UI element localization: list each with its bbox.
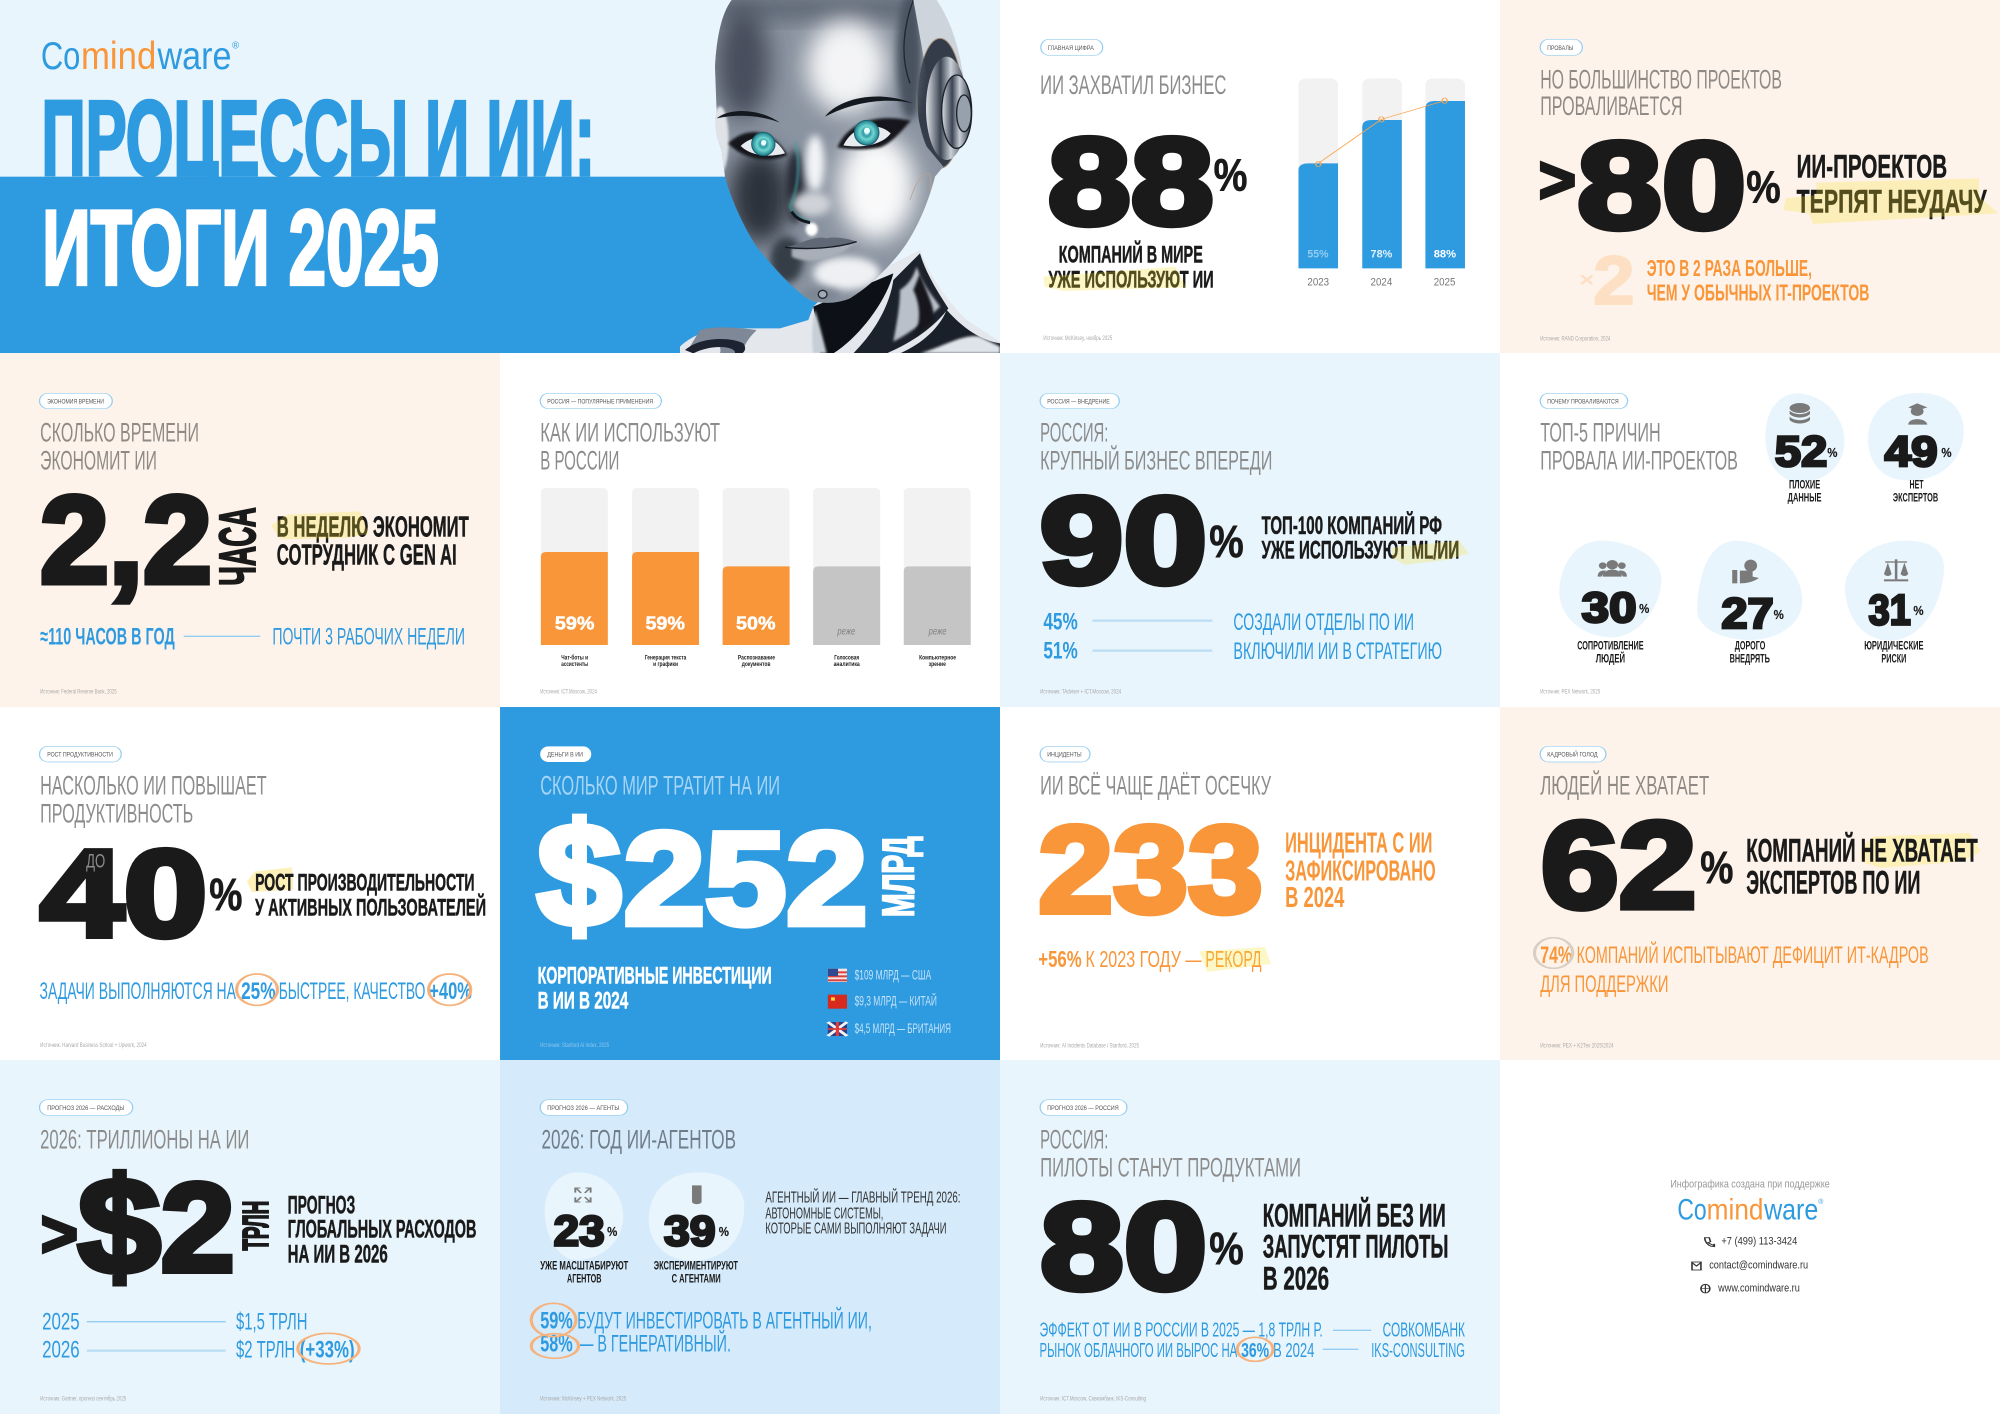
bar chart: 2023 [1307,275,1329,288]
deficit note: ДЛЯ ПОДДЕРЖКИ [1540,970,1668,997]
panel: $252B investment: $109 МЛРД — США [855,967,931,983]
stat: no experts [1868,393,1964,504]
stat: expensive [1697,541,1802,665]
text: ИНЦИДЕНТА С ИИ [1285,827,1432,859]
big number: $ [78,1150,161,1303]
big number [40,471,266,609]
effect and market lines [1040,1318,1465,1362]
tag [40,746,121,762]
tag: ИНЦИДЕНТЫ [1047,751,1082,759]
big number [1539,117,1781,254]
caption [1285,827,1436,914]
bar chart: 78% [1371,247,1392,260]
annual saving: ≈110 ЧАСОВ В ГОД [40,623,175,650]
stat: scaling [540,1172,628,1285]
panel: Russia pilots 80%: Источник: ICT.Moscow, Совкомбанк, IKS-Consulting [1040,1395,1146,1402]
big number: $ [537,794,621,957]
panel: contacts: ware [1764,1193,1818,1226]
tag [1540,746,1606,762]
text: СОЗДАЛИ ОТДЕЛЫ ПО ИИ [1233,608,1414,635]
stat: experimenting [649,1172,744,1285]
bar chart: 2024 [1371,275,1392,288]
caption: НА ИИ В 2026 [288,1240,388,1268]
panel: productivity 40% [0,707,500,1060]
text: В НЕДЕЛЮ ЭКОНОМИТ [277,511,469,543]
stat rows: 45% [1043,608,1078,635]
text: ЭФФЕКТ ОТ ИИ В РОССИИ В 2025 — 1,8 ТРЛН Р. [1040,1318,1323,1341]
yearly comparison: $1,5 ТРЛН [236,1308,307,1335]
heading: РОССИЯ: [1040,417,1108,448]
panel: contacts: contact@comindware.ru [1709,1259,1808,1271]
logo: Comindware: mind [81,34,156,78]
panel: productivity 40%: РОСТ ПРОДУКТИВНОСТИ [47,751,113,759]
speed and quality line: ЗАДАЧИ ВЫПОЛНЯЮТСЯ НА [40,977,236,1004]
breakdown by country [828,967,951,1036]
stat: legal risks: 31 [1869,586,1911,634]
bar chart: документов [742,661,770,668]
panel: hero title: ИТОГИ 2025 [42,189,439,307]
robot: brows [717,97,913,123]
big number: ДО [86,850,105,872]
title [41,79,595,307]
multiplier [1579,243,1635,319]
deficit note: 74% [1540,941,1572,968]
text: КОМПАНИЙ БЕЗ ИИ [1263,1197,1446,1234]
effect and market lines: 36% [1241,1338,1269,1362]
speed and quality line: 25% [241,977,276,1004]
panel: top-5 failure reasons: СОПРОТИВЛЕНИЕ [1577,639,1644,652]
big number: 2 [161,1157,235,1298]
panel: Russia pilots 80% [1000,1060,1500,1414]
bar chart: 50% [736,613,776,634]
logo: Comindware: Co [1677,1193,1707,1226]
heading [1040,1124,1301,1183]
caption [271,511,469,571]
panel: talent shortage 62%: Источник: PEX + K2Тех 2025/2024 [1540,1042,1614,1049]
bar chart: Генерация текста [645,654,686,662]
stat: no experts: % [1941,447,1952,460]
bar chart: 55% [1307,247,1328,260]
panel: year of AI agents: С АГЕНТАМИ [672,1271,721,1285]
heading: ТОП-5 ПРИЧИН [1540,417,1661,448]
panel: contacts [1500,1060,2000,1414]
panel: 233 incidents: РЕКОРД [1205,946,1261,972]
big number: 2,2 [40,471,212,609]
bar chart: 88% [1434,247,1456,260]
logo: Comindware: mind [1707,1193,1763,1226]
big number: 40 [40,825,207,962]
text: ВКЛЮЧИЛИ ИИ В СТРАТЕГИЮ [1233,637,1442,664]
investment note [531,1303,872,1358]
panel: over 80% fail [1500,0,2000,353]
panel: time saved: СКОЛЬКО ВРЕМЕНИ [40,417,199,448]
stat: legal risks [1845,541,1944,665]
year-over-year growth: +56% [1038,946,1082,972]
stat: bad data: 52 [1775,427,1827,475]
stat: resistance [1559,541,1661,665]
bar chart: зрение [929,661,946,668]
heading [540,417,720,476]
panel: $252B investment: Источник: Stanford AI Index, 2025 [540,1042,609,1048]
logo: Comindware: ware [157,34,232,78]
stat: expensive: 27 [1721,589,1774,637]
text: СОТРУДНИК С GEN AI [277,540,457,571]
text: КОТОРЫЕ САМИ ВЫПОЛНЯЮТ ЗАДАЧИ [765,1220,946,1238]
panel: contacts: www.comindware.ru [1718,1282,1800,1294]
bar chart: реже [928,626,946,637]
panel: Russia adoption 90% [1000,353,1500,707]
investment note: 59% [540,1307,573,1334]
comparison [1647,255,1869,306]
text: АГЕНТНЫЙ ИИ — ГЛАВНЫЙ ТРЕНД 2026: [765,1188,961,1207]
stat: legal risks: РИСКИ [1881,652,1906,665]
bar chart: Чат-боты и [561,654,588,662]
text: ЗАПУСТЯТ ПИЛОТЫ [1263,1228,1448,1265]
stat: expensive: ДОРОГО [1735,639,1765,652]
robot: right eye [837,118,911,149]
panel: talent shortage 62%: КАДРОВЫЙ ГОЛОД [1547,750,1598,759]
tag [540,746,591,762]
stat: bad data: % [1827,447,1837,460]
panel: Russia adoption 90%: КРУПНЫЙ БИЗНЕС ВПЕРЕДИ [1040,445,1272,476]
big number: МЛРД [873,836,923,917]
panel: 88% companies [1000,0,1500,353]
stat: no experts: 49 [1885,427,1938,475]
text: СОВКОМБАНК [1383,1318,1465,1341]
speed and quality line [40,974,472,1005]
caption [1783,148,1998,224]
panel: 233 incidents: Источник: AI Incidents Database / Stanford, 2025 [1040,1042,1139,1049]
year-over-year growth: К 2023 ГОДУ — [1085,946,1202,972]
panel: time saved: ЭКОНОМИЯ ВРЕМЕНИ [47,398,104,406]
panel: $252B investment [500,707,1000,1060]
panel: talent shortage 62%: % [1700,842,1733,893]
text: ГЛОБАЛЬНЫХ РАСХОДОВ [288,1215,476,1244]
heading [1540,417,1738,476]
text: БУДУТ ИНВЕСТИРОВАТЬ В АГЕНТНЫЙ ИИ, [577,1306,872,1334]
text: УЖЕ ИСПОЛЬЗУЮТ ML/ИИ [1261,536,1459,564]
big number: 80 [1040,1178,1207,1315]
panel: hero title: ® [232,40,239,51]
tag [40,393,112,409]
bar chart [1298,78,1465,288]
panel: talent shortage 62% [1500,707,2000,1060]
panel: AI use in Russia [500,353,1000,707]
panel: $252B investment: $9,3 МЛРД — КИТАЙ [855,993,937,1009]
heading [1540,64,1782,121]
stat: expensive: ВНЕДРЯТЬ [1730,652,1770,665]
panel: productivity 40%: Источник: Harvard Business School + Upwork, 2024 [40,1042,147,1048]
stat: legal risks: % [1913,605,1924,618]
caption [1261,510,1469,565]
caption: В 2024 [1285,882,1344,914]
heading: РОССИЯ: [1040,1124,1108,1154]
panel: AI use in Russia: КАК ИИ ИСПОЛЬЗУЮТ [540,417,720,448]
panel: 88% companies: ИИ ЗАХВАТИЛ БИЗНЕС [1040,70,1226,100]
panel: time saved: ЭКОНОМИТ ИИ [40,445,157,476]
panel: 2026 spending forecast: 2026: ТРИЛЛИОНЫ НА ИИ [40,1124,249,1154]
text: БЫСТРЕЕ, КАЧЕСТВО [279,977,425,1004]
big number: 233 [1038,801,1263,938]
panel: year of AI agents: УЖЕ МАСШТАБИРУЮТ [540,1258,628,1272]
text: ЗАФИКСИРОВАНО [1285,855,1436,887]
panel: Russia adoption 90%: РОССИЯ — ВНЕДРЕНИЕ [1047,398,1110,406]
tag [1540,39,1582,55]
caption [1263,1197,1448,1297]
bar chart: Распознавание [738,654,775,662]
bar chart: Компьютерное [919,654,956,662]
stat: scaling: 23 [554,1207,605,1255]
panel: hero title [0,0,1000,353]
big number: 252 [624,805,867,952]
panel: productivity 40%: ПРОДУКТИВНОСТЬ [40,798,193,829]
panel: 233 incidents [1000,707,1500,1060]
bar chart [541,488,971,668]
text: IKS-CONSULTING [1371,1338,1465,1362]
logo: Comindware: Co [41,34,80,78]
stat: scaling: % [607,1226,617,1239]
panel: year of AI agents [500,1060,1000,1414]
bar chart: 2025 [1434,275,1455,288]
panel: Russia adoption 90%: Источник: TAdviser + ICT.Moscow, 2024 [1040,688,1121,695]
panel: Russia pilots 80%: ПИЛОТЫ СТАНУТ ПРОДУКТАМИ [1040,1152,1301,1183]
big number: 62 [1541,796,1696,934]
tag [40,1100,133,1115]
panel: 2026 spending forecast: (+33%) [300,1336,355,1363]
panel: 88% companies: Источник: McKinsey, ноябрь 2025 [1043,335,1112,341]
panel: AI use in Russia: РОССИЯ — ПОПУЛЯРНЫЕ ПРИМЕНЕНИЯ [547,398,653,406]
panel: time saved [0,353,500,707]
stat: bad data [1765,393,1844,504]
effect and market lines: РЫНОК ОБЛАЧНОГО ИИ ВЫРОС НА [1040,1338,1237,1362]
panel: 2026 spending forecast [0,1060,500,1414]
panel: year of AI agents: ЭКСПЕРИМЕНТИРУЮТ [654,1258,738,1272]
panel: top-5 failure reasons [1500,353,2000,707]
stat rows [1043,608,1442,664]
big number: > [1539,144,1576,216]
panel: top-5 failure reasons: ПОЧЕМУ ПРОВАЛИВАЮТСЯ [1547,398,1619,406]
text: ТОП-100 КОМПАНИЙ РФ [1261,510,1442,540]
yearly comparison: 2025 [42,1308,80,1335]
panel: 88% companies: % [1214,150,1247,200]
bar chart: аналитика [834,661,860,668]
tag: ДЕНЬГИ В ИИ [547,751,583,759]
deficit note [1534,938,1929,997]
panel: $252B investment: СКОЛЬКО МИР ТРАТИТ НА ИИ [540,770,780,801]
heading: В РОССИИ [540,445,619,476]
big number [537,794,923,957]
bar chart: ассистенты [561,661,588,668]
bar chart: и графики [653,660,678,668]
panel: productivity 40%: +40% [429,977,472,1004]
caption [288,1191,476,1268]
panel: year of AI agents: 2026: ГОД ИИ-АГЕНТОВ [541,1124,736,1154]
contact: phone [1705,1235,1797,1247]
stat: experimenting: 39 [664,1207,716,1255]
panel: Russia adoption 90%: % [1209,516,1244,567]
yearly comparison: 2026 [42,1336,80,1363]
year-over-year growth [1038,946,1271,972]
panel: productivity 40%: % [209,869,242,920]
text: $4,5 МЛРД — БРИТАНИЯ [855,1021,951,1036]
yearly comparison: $2 ТРЛН [236,1336,295,1363]
panel: Russia pilots 80%: % [1209,1223,1244,1274]
effect and market lines: В 2024 [1273,1338,1314,1362]
caption [1746,831,1981,901]
stat: scaling: АГЕНТОВ [567,1271,601,1285]
caption [1043,240,1214,293]
stat: experimenting: % [719,1226,729,1239]
bar chart: 59% [555,613,594,634]
heading [40,417,199,476]
big number [41,1150,277,1303]
bar chart: реже [837,626,855,637]
tag [1040,746,1090,762]
tag [1540,393,1628,409]
panel: hero title: ПРОЦЕССЫ И ИИ: [41,79,595,198]
bar chart: Голосовая [834,654,859,662]
investment note: 58% [540,1330,573,1357]
tag [1040,1100,1127,1115]
stat: expensive: % [1774,609,1784,622]
stat: resistance: 30 [1582,583,1637,631]
panel: time saved: Источник: Federal Reserve Bank, 2025 [40,688,117,695]
investment note: — В ГЕНЕРАТИВНЫЙ. [579,1329,731,1357]
panel: year of AI agents: ПРОГНОЗ 2026 — АГЕНТЫ [547,1105,619,1112]
big number: 90 [1040,472,1207,609]
contact: email [1692,1259,1808,1271]
panel: over 80% fail: Источник: RAND Corporation, 2024 [1540,335,1610,342]
panel: AI use in Russia: Источник: ICT.Moscow, 2024 [540,688,597,695]
contact: website [1701,1282,1800,1294]
logo: Comindware: ® [1818,1198,1824,1206]
description [765,1188,961,1238]
panel: over 80% fail: % [1746,162,1781,212]
illustration: robot head [680,0,1000,353]
caption [247,867,486,921]
panel: contacts: +7 (499) 113-3424 [1721,1235,1797,1247]
stat: bad data: ПЛОХИЕ [1789,477,1820,491]
caption: В ИИ В 2024 [538,987,628,1014]
tag [1041,39,1103,55]
tag [1040,393,1119,409]
panel: 2026 spending forecast: ПРОГНОЗ 2026 — РАСХОДЫ [47,1105,124,1112]
big number: 80 [1577,117,1746,254]
robot: left eye [728,132,787,159]
panel: Russia pilots 80%: ПРОГНОЗ 2026 — РОССИЯ [1047,1105,1119,1112]
stat: no experts: НЕТ [1910,477,1924,491]
caption [538,962,772,1014]
panel: 233 incidents: ИИ ВСЁ ЧАЩЕ ДАЁТ ОСЕЧКУ [1040,770,1272,801]
caption: В 2026 [1263,1260,1329,1297]
tag [540,1100,628,1115]
text: ПОЧТИ 3 РАБОЧИХ НЕДЕЛИ [272,623,465,650]
yearly comparison [42,1308,359,1364]
panel: 88% companies: УЖЕ ИСПОЛЬЗУЮТ ИИ [1048,266,1214,293]
panel: $252B investment: КОРПОРАТИВНЫЕ ИНВЕСТИЦИИ [538,962,772,989]
stat rows: 51% [1043,637,1078,664]
robot: ear module [913,0,972,168]
caption: ПРОГНОЗ [288,1191,355,1219]
big number: ТРЛН [237,1201,277,1251]
panel: 2026 spending forecast: Источник: Gartner, прогноз сентябрь 2025 [40,1395,126,1402]
panel: productivity 40%: НАСКОЛЬКО ИИ ПОВЫШАЕТ [40,770,267,801]
big number: > [41,1198,78,1270]
panel: 88% companies: КОМПАНИЙ В МИРЕ [1059,240,1203,268]
stat: bad data: ДАННЫЕ [1788,491,1821,504]
heading [1040,417,1272,476]
tag: ГЛАВНАЯ ЦИФРА [1048,45,1094,52]
tag [540,393,661,409]
stat: resistance: ЛЮДЕЙ [1596,652,1625,665]
multiplier: × [1579,269,1594,291]
text: У АКТИВНЫХ ПОЛЬЗОВАТЕЛЕЙ [255,893,486,921]
panel: year of AI agents: Источник: McKinsey + PEX Network, 2025 [540,1395,626,1402]
multiplier: 2 [1593,243,1635,319]
text: РОСТ ПРОИЗВОДИТЕЛЬНОСТИ [255,869,475,896]
heading: ПРОВАЛИВАЕТСЯ [1540,91,1682,121]
panel: top-5 failure reasons: Источник: PEX Network, 2025 [1540,688,1600,695]
heading [40,770,267,829]
big number: 88 [1048,113,1214,250]
bar chart: 59% [645,613,685,634]
panel: year of AI agents: АВТОНОМНЫЕ СИСТЕМЫ, [765,1205,883,1222]
stat: resistance: % [1639,603,1649,616]
big number: ЧАСА [209,507,266,586]
tag: ПРОВАЛЫ [1547,45,1573,52]
